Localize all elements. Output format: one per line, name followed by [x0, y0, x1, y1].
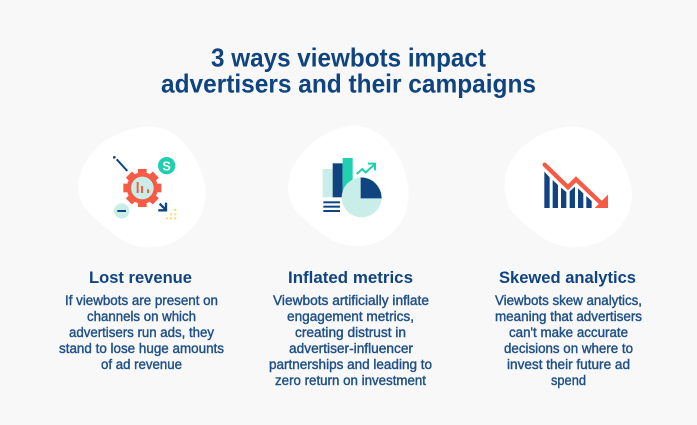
icon: falling bar chart on blob	[505, 127, 632, 247]
text block: lost revenue: of ad revenue	[101, 357, 182, 372]
text block: skewed analytics: decisions on where to	[504, 341, 633, 356]
icon: bars and pie chart on blob	[288, 126, 409, 246]
text block: skewed analytics: can't make accurate	[509, 325, 628, 340]
text block: inflated metrics: Viewbots artificially inflate	[273, 293, 429, 308]
text block: skewed analytics: invest their future ad	[507, 357, 630, 372]
text block: lost revenue: stand to lose huge amounts	[59, 341, 224, 356]
text block: inflated metrics: zero return on investment	[275, 373, 426, 388]
text block: lost revenue: advertisers run ads, they	[69, 325, 214, 340]
text block: lost revenue: If viewbots are present on	[65, 293, 218, 308]
text block: inflated metrics: engagement metrics,	[287, 309, 414, 324]
panel: skewed analytics	[495, 127, 642, 388]
panel: inflated metrics	[269, 126, 432, 388]
title: advertisers and their campaigns	[161, 68, 536, 98]
heading: inflated metrics: Inflated metrics	[288, 268, 413, 287]
text block: skewed analytics	[495, 293, 642, 388]
text block: skewed analytics: spend	[551, 373, 586, 388]
heading: lost revenue: Lost revenue	[89, 268, 192, 287]
title	[161, 42, 536, 98]
text block: lost revenue	[59, 293, 224, 372]
text block: inflated metrics: creating distrust in	[295, 325, 406, 340]
title: 3 ways viewbots impact	[211, 42, 486, 72]
heading: skewed analytics: Skewed analytics	[499, 268, 636, 287]
panel: lost revenue	[59, 127, 224, 372]
text block: inflated metrics: advertiser-influencer	[289, 341, 414, 356]
text block: inflated metrics	[269, 293, 432, 388]
text block: skewed analytics: Viewbots skew analytics,	[495, 293, 642, 308]
icon: gear with dollar and down arrow on blob: S	[162, 159, 171, 173]
text block: inflated metrics: partnerships and leading to	[269, 357, 432, 372]
text block: skewed analytics: meaning that advertisers	[495, 309, 642, 324]
text block: lost revenue: channels on which	[87, 309, 196, 324]
icon: gear with dollar and down arrow on blob	[78, 127, 206, 247]
